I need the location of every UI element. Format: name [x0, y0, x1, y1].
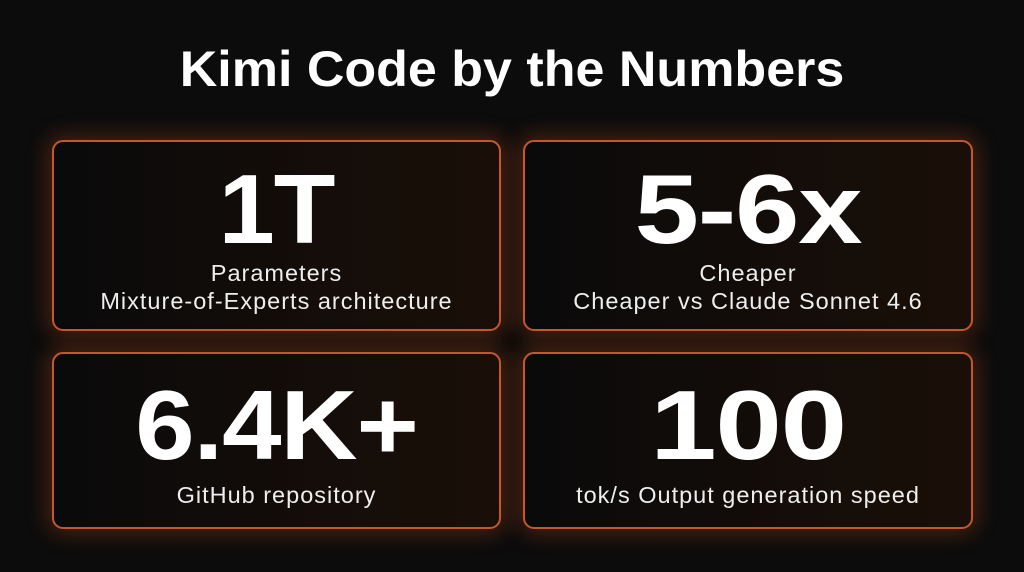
panel: parameters: [52, 140, 501, 331]
stat number: 1T: [219, 154, 334, 264]
stat label: Parameters: [211, 260, 342, 286]
stat label: [100, 260, 453, 314]
title: Kimi Code by the Numbers: [180, 41, 844, 97]
stat label: GitHub repository: [177, 482, 376, 508]
stat number: 5-6x: [635, 154, 861, 264]
stat label: [573, 260, 923, 314]
stat label: tok/s Output generation speed: [576, 482, 920, 508]
panel: speed: [523, 352, 973, 529]
panel: cost: [523, 140, 973, 331]
stat number: 6.4K+: [135, 370, 418, 480]
stat label: Cheaper vs Claude Sonnet 4.6: [573, 288, 923, 314]
panel: github: [52, 352, 501, 529]
stat label: Cheaper: [699, 260, 797, 286]
stat label: Mixture-of-Experts architecture: [100, 288, 453, 314]
stat number: 100: [650, 370, 846, 480]
